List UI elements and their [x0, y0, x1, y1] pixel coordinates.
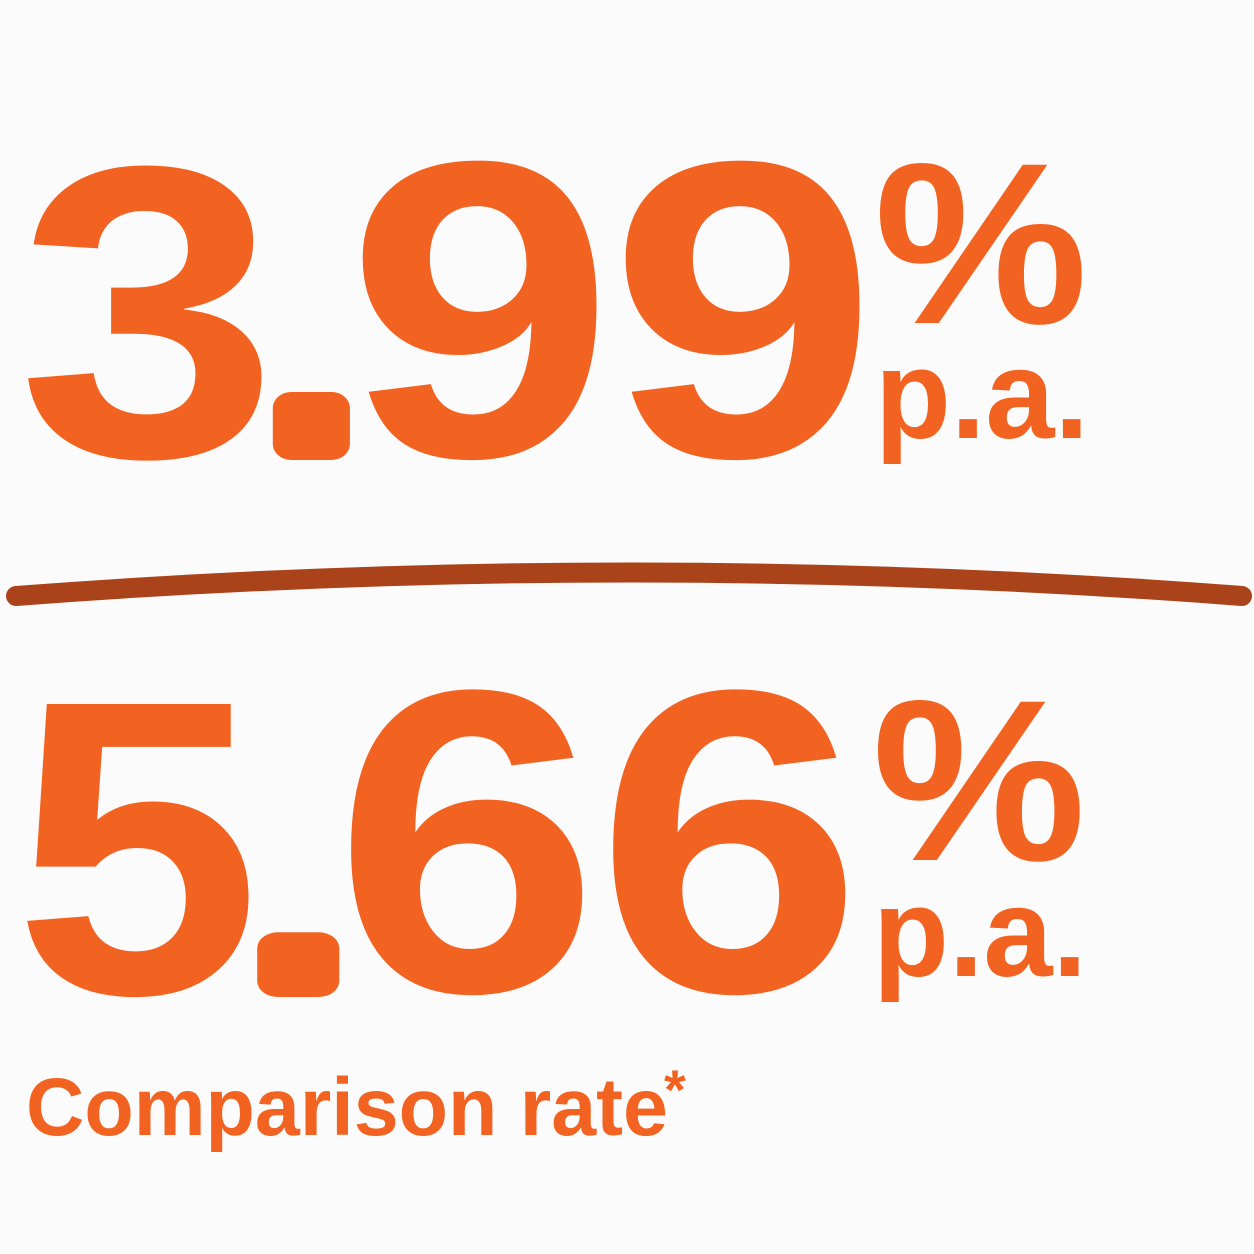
rate number 5.66: 6	[334, 600, 600, 1083]
per annum label: p.a.	[873, 862, 1087, 1003]
rate number 3.99: .	[272, 226, 351, 496]
rate number 3.99: 9	[609, 73, 877, 546]
interest rate figure	[17, 73, 1089, 546]
per annum label: p.a.	[875, 324, 1089, 465]
rate number 3.99	[17, 73, 877, 546]
asterisk: *	[664, 1058, 686, 1121]
rate number 5.66	[14, 600, 863, 1083]
rate number 3.99: 9	[346, 73, 614, 546]
percent sign: %	[872, 652, 1086, 909]
rate number 5.66: .	[259, 782, 338, 1028]
rate number 5.66: 5	[14, 614, 261, 1083]
comparison rate label: Comparison rate	[26, 1062, 668, 1153]
rate number 5.66: 6	[596, 600, 863, 1083]
percent sign: %	[874, 115, 1088, 372]
divider line	[16, 572, 1242, 596]
comparison rate figure	[14, 600, 1087, 1083]
rate number 3.99: 3	[17, 80, 278, 545]
